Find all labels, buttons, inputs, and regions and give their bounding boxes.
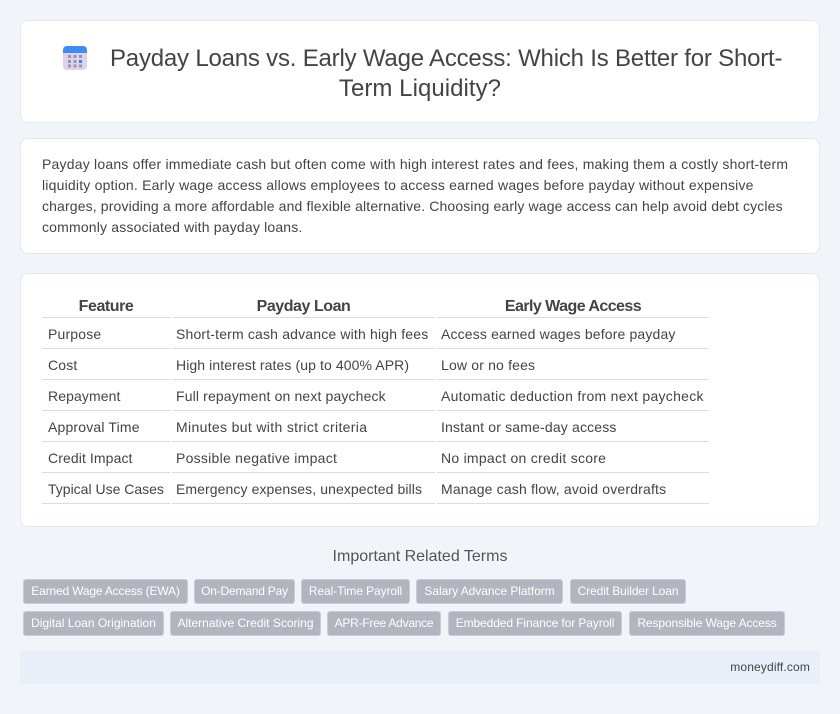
row: credit impact: Possible negative impact [176, 450, 337, 466]
related terms tags: Real-Time Payroll [309, 584, 402, 598]
intro paragraph: liquidity option. Early wage access allows employees to access earned wages before payday without expensive [42, 177, 754, 193]
related terms tags: Digital Loan Origination [31, 616, 156, 630]
related terms tags: Earned Wage Access (EWA) [31, 584, 180, 598]
row: credit impact [48, 450, 606, 466]
intro paragraph: charges, providing a more affordable and flexible alternative. Choosing early wage access can help avoid debt cycles [42, 198, 783, 214]
row: purpose: Access earned wages before payday [441, 326, 676, 342]
row: approval time: Instant or same-day access [441, 419, 617, 435]
table header: Early Wage Access [505, 298, 641, 315]
footer source: moneydiff.com [730, 660, 810, 674]
footer bar [20, 651, 820, 684]
related terms tags [23, 579, 785, 636]
intro text panel [20, 138, 820, 254]
related terms tags: Embedded Finance for Payroll [456, 616, 614, 630]
icon: calendar [63, 46, 87, 70]
intro paragraph: commonly associated with payday loans. [42, 219, 303, 235]
related terms tags: Alternative Credit Scoring [177, 616, 314, 630]
row: cost: Cost [48, 357, 77, 373]
related terms tags: Responsible Wage Access [637, 616, 777, 630]
related terms heading: Important Related Terms [333, 548, 507, 565]
row: cost: Low or no fees [441, 357, 535, 373]
row: typical use cases [48, 481, 666, 497]
title [110, 45, 782, 102]
related terms tags: On-Demand Pay [201, 584, 288, 598]
row: repayment [48, 388, 704, 404]
title card [20, 20, 820, 123]
row: cost: High interest rates (up to 400% APR) [176, 357, 409, 373]
table header: Feature [79, 298, 133, 315]
intro paragraph: Payday loans offer immediate cash but often come with high interest rates and fees, making them a costly short-term [42, 156, 788, 172]
intro paragraph [42, 156, 788, 235]
related terms tags: Credit Builder Loan [578, 584, 678, 598]
row: repayment: Automatic deduction from next paycheck [441, 388, 704, 404]
row: credit impact: No impact on credit score [441, 450, 606, 466]
row: repayment: Full repayment on next paycheck [176, 388, 386, 404]
row: typical use cases: Manage cash flow, avoid overdrafts [441, 481, 666, 497]
table header: Payday Loan [257, 298, 350, 315]
row: cost [48, 357, 535, 373]
row: approval time: Minutes but with strict criteria [176, 419, 367, 435]
related terms tags: APR-Free Advance [335, 616, 433, 630]
related terms tags: Salary Advance Platform [424, 584, 555, 598]
row: typical use cases: Emergency expenses, unexpected bills [176, 481, 422, 497]
row: purpose: Purpose [48, 326, 101, 342]
row: repayment: Repayment [48, 388, 120, 404]
row: credit impact: Credit Impact [48, 450, 133, 466]
title: Payday Loans vs. Early Wage Access: Which Is Better for Short- [110, 45, 782, 72]
row: purpose: Short-term cash advance with high fees [176, 326, 428, 342]
row: approval time: Approval Time [48, 419, 140, 435]
table header [79, 298, 641, 315]
title: Term Liquidity? [339, 75, 501, 102]
comparison table panel [20, 273, 820, 527]
row: approval time [48, 419, 617, 435]
row: purpose [48, 326, 676, 342]
row: typical use cases: Typical Use Cases [48, 481, 164, 497]
